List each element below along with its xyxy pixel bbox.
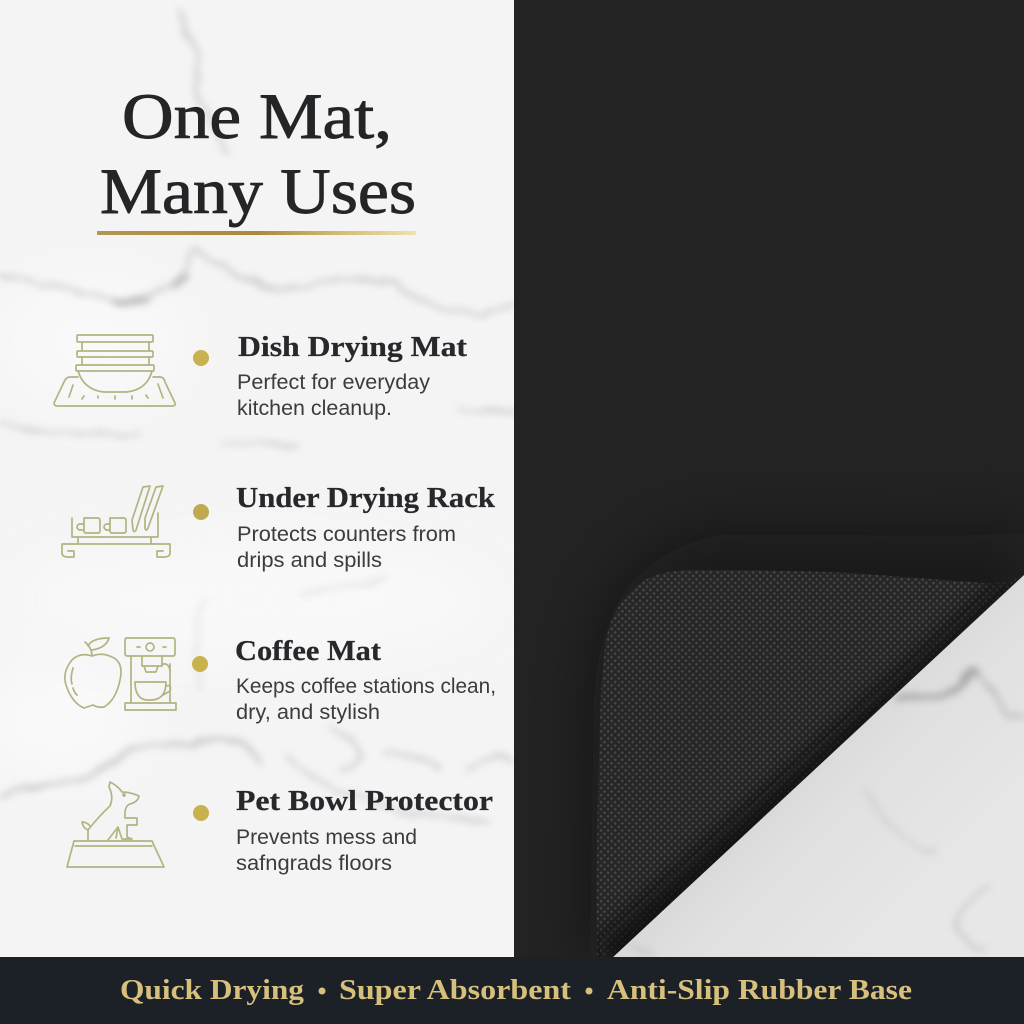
heading and text: dish drying mat: Perfect for everyday bbox=[237, 371, 431, 394]
bullet: pet bowl protector bbox=[193, 805, 209, 821]
heading and text: dish drying mat: Dish Drying Mat bbox=[238, 332, 468, 363]
heading and text: coffee mat: Keeps coffee stations clean, bbox=[236, 675, 496, 698]
mat underside folded corner bbox=[597, 570, 1024, 965]
footer bar bbox=[0, 957, 1024, 1024]
heading and text: coffee mat: dry, and stylish bbox=[236, 701, 380, 724]
footer bar: Anti-Slip Rubber Base bbox=[607, 974, 912, 1006]
icon: apple and coffee machine bbox=[65, 638, 176, 710]
icon: under drying rack bbox=[62, 486, 170, 557]
title bbox=[100, 81, 416, 228]
icon: dog and pet bowl bbox=[67, 782, 164, 867]
footer bar: Quick Drying bbox=[120, 974, 305, 1006]
heading and text: dish drying mat: kitchen cleanup. bbox=[237, 397, 392, 420]
heading and text: dish drying mat bbox=[237, 332, 468, 420]
heading and text: coffee mat: Coffee Mat bbox=[235, 636, 382, 667]
mat curl shadow bbox=[719, 566, 998, 856]
heading and text: pet bowl protector: Prevents mess and bbox=[236, 826, 417, 849]
heading and text: pet bowl protector: Pet Bowl Protector bbox=[236, 786, 493, 817]
heading and text: pet bowl protector: safngrads floors bbox=[236, 852, 392, 875]
heading and text: under drying rack: Protects counters from bbox=[237, 523, 456, 546]
heading and text: under drying rack bbox=[236, 483, 495, 572]
marble surface under the corner bbox=[613, 575, 1024, 957]
gold title underline bbox=[97, 231, 416, 235]
heading and text: coffee mat bbox=[235, 636, 496, 724]
heading and text: under drying rack: drips and spills bbox=[237, 549, 382, 572]
title: Many Uses bbox=[100, 156, 416, 228]
bullet: under drying rack bbox=[193, 504, 209, 520]
bullet: coffee mat bbox=[192, 656, 208, 672]
bullet: dish drying mat bbox=[193, 350, 209, 366]
panel: marble background bbox=[0, 0, 515, 957]
title: One Mat, bbox=[122, 81, 392, 153]
heading and text: under drying rack: Under Drying Rack bbox=[236, 483, 495, 514]
heading and text: pet bowl protector bbox=[236, 786, 493, 875]
icon: dish drying mat bbox=[54, 335, 175, 406]
footer bar: Super Absorbent bbox=[339, 974, 571, 1006]
panel: black mat bbox=[514, 0, 1024, 957]
